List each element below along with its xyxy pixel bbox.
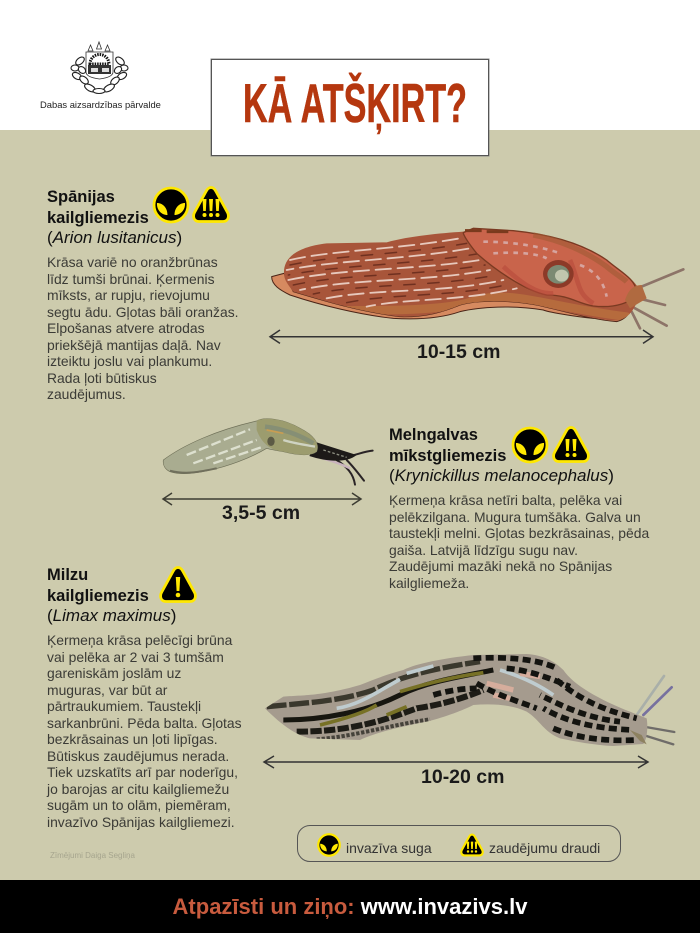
legend icon: invasive species: [317, 833, 341, 857]
legend label: invasive species: invazīva suga: [346, 840, 432, 856]
heading: Melngalvas mīkstgliemezis: mīkstgliemezis: [389, 447, 506, 465]
heading: Spānijas kailgliemezis: (Arion lusitanicus): [47, 228, 182, 247]
text: giant slug description: invazīvo Spānijas kailgliemezi.: [47, 814, 235, 830]
text: black-headed slug description: taustekļi melni. Gļotas bezkrāsainas, pēda: [389, 525, 649, 541]
icon: damage warning: [159, 566, 197, 603]
heading: Melngalvas mīkstgliemezis: (Krynickillus melanocephalus): [389, 466, 614, 485]
text: giant slug description: Ķermeņa krāsa pelēcīgi brūna: [47, 632, 232, 648]
text: Spanish slug description: Rada ļoti būtiskus: [47, 370, 157, 386]
text: giant slug description: muguras, var būt ar: [47, 682, 167, 698]
text: giant slug description: Būtiskus zaudējumus nerada.: [47, 748, 229, 764]
agency name: Dabas aizsardzības pārvalde: [40, 99, 161, 110]
text: black-headed slug description: Zaudējumi mazāki nekā no Spānijas: [389, 558, 612, 574]
text: giant slug description: pārtraukumiem. Taustekļi: [47, 698, 201, 714]
icon: invasive species: [512, 426, 548, 464]
text: giant slug description: gareniskām joslām uz: [47, 665, 181, 681]
heading: Spānijas kailgliemezis: [47, 188, 182, 247]
heading: Spānijas kailgliemezis: kailgliemezis: [47, 209, 149, 227]
legend label: damage threats: zaudējumu draudi: [489, 840, 600, 856]
text: Spanish slug description: zaudējumus.: [47, 386, 126, 402]
text: black-headed slug description: pelēkzilgana. Mugura tumšāka. Galva un: [389, 509, 641, 525]
arrow: 3,5-5 cm: [162, 492, 362, 506]
text: black-headed slug description: Ķermeņa krāsa netīri balta, pelēka vai: [389, 492, 622, 508]
heading: Milzu kailgliemezis: [47, 566, 176, 625]
text: giant slug description: vai pelēka ar 2 vai 3 tumšām: [47, 649, 224, 665]
credit: Zīmējumi Daiga Segliņa: [50, 851, 135, 860]
arrow: 10-15 cm: [268, 329, 654, 344]
text: giant slug description: [46, 632, 242, 830]
heading: Milzu kailgliemezis: (Limax maximus): [47, 606, 176, 625]
text: giant slug description: sarkanbrūni. Pēda balta. Gļotas: [47, 715, 242, 731]
heading: Milzu kailgliemezis: kailgliemezis: [47, 587, 149, 605]
text: Spanish slug description: [47, 254, 238, 402]
legend: [297, 825, 621, 862]
text: Spanish slug description: segtu ādu. Gļotas bāli oranžas.: [47, 304, 238, 320]
text: giant slug description: jo barojas ar citu kailgliemežu: [47, 781, 229, 797]
heading: Milzu kailgliemezis: Milzu: [47, 566, 88, 584]
text: Spanish slug description: Krāsa variē no oranžbrūnas: [47, 254, 218, 270]
text: Spanish slug description: priekšējā mantijas daļā. Nav: [47, 337, 221, 353]
footer band: [0, 880, 700, 933]
heading: Spānijas kailgliemezis: Spānijas: [47, 188, 115, 206]
size label: 10-15 cm: 10-15 cm: [417, 341, 500, 363]
text: Spanish slug description: līdz tumši brūnai. Ķermenis: [47, 271, 215, 287]
text: giant slug description: sugām un to olām, piemēram,: [47, 797, 231, 813]
text: black-headed slug description: kailgliemeža.: [389, 575, 469, 591]
illustration: Spanish slug: [271, 228, 685, 330]
text: black-headed slug description: [389, 492, 650, 591]
illustration: black-headed slug: [162, 418, 374, 486]
arrow: 10-20 cm: [262, 755, 650, 769]
footer call to action: Atpazīsti un ziņo: www.invazivs.lv: [173, 894, 527, 919]
text: Spanish slug description: mīksts, ar rupju, rievojumu: [47, 287, 210, 303]
heading: Melngalvas mīkstgliemezis: Melngalvas: [389, 426, 478, 444]
title box: [211, 59, 489, 156]
size label: 10-20 cm: 10-20 cm: [421, 766, 504, 788]
text: giant slug description: Tiek uzskatīts arī par noderīgu,: [47, 764, 238, 780]
size label: 3,5-5 cm: 3,5-5 cm: [222, 502, 300, 524]
text: black-headed slug description: gaiša. Latvijā līdzīgu sugu nav.: [389, 542, 578, 558]
text: Spanish slug description: Elpošanas atvere atrodas: [47, 320, 205, 336]
text: giant slug description: bezkrāsainas un ļoti lipīgas.: [47, 731, 218, 747]
text: Spanish slug description: izteiktu joslu vai plankumu.: [47, 353, 212, 369]
heading: Melngalvas mīkstgliemezis: [389, 426, 614, 485]
icon: damage warning: [552, 426, 590, 463]
illustration: giant slug: [265, 654, 676, 746]
legend icon: damage threats: [460, 834, 484, 856]
logo: coat of arms and agency name: [40, 40, 161, 110]
icon: invasive species: [152, 186, 190, 224]
icon: damage warning: [192, 186, 230, 223]
